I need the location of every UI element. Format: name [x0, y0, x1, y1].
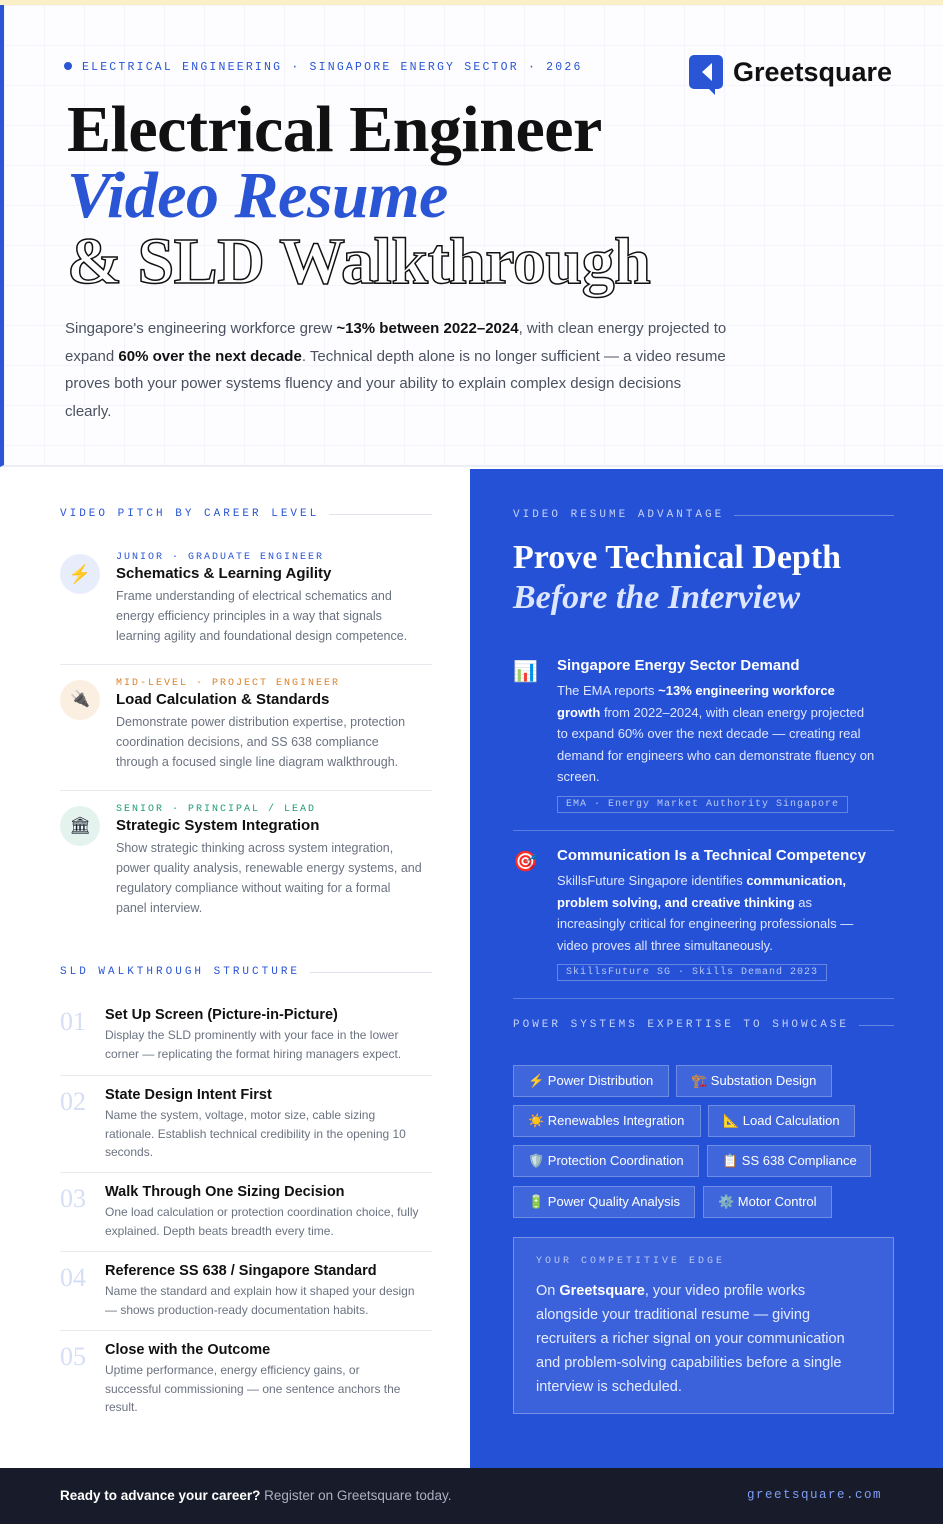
block: communication [513, 847, 894, 999]
card: senior: Show strategic thinking across system integration, power quality analysis, renewable energy systems, and regulatory compliance without waiting for a formal panel interview. [116, 841, 422, 915]
step 05: Uptime performance, energy efficiency gains, or successful commissioning — one sentence anchors the result. [105, 1363, 400, 1414]
label: expertise: POWER SYSTEMS EXPERTISE TO SHOWCASE [513, 1019, 849, 1031]
section label: SLD WALKTHROUGH STRUCTURE [60, 966, 300, 978]
chips [513, 1065, 871, 1218]
card: mid: 🔌 [70, 691, 90, 708]
card: mid: Demonstrate power distribution expertise, protection coordination decisions, and SS 638 compliance through a focused single line diagram walkthrough. [116, 715, 405, 769]
label: VIDEO RESUME ADVANTAGE [513, 509, 724, 521]
step 02: 02 [60, 1087, 86, 1116]
footer [0, 1468, 943, 1524]
chips: 📋 SS 638 Compliance [722, 1153, 857, 1168]
card: mid [60, 678, 432, 791]
step 01 [60, 1007, 432, 1076]
card: senior: SENIOR · PRINCIPAL / LEAD [116, 804, 316, 815]
block: demand: 📊 [513, 661, 538, 683]
block: demand: Singapore Energy Sector Demand [557, 657, 800, 674]
card: junior [60, 552, 432, 665]
step 05 [60, 1342, 400, 1414]
block: demand [513, 657, 894, 831]
chips: 🏗️ Substation Design [691, 1073, 816, 1088]
block: communication: SkillsFuture SG · Skills Demand 2023 [566, 967, 818, 978]
chips: 🔋 Power Quality Analysis [528, 1194, 680, 1209]
chips: ⚡ Power Distribution [528, 1073, 653, 1088]
step 05: Close with the Outcome [105, 1342, 270, 1358]
step 03: One load calculation or protection coordination choice, fully explained. Depth beats breadth every time. [105, 1205, 419, 1238]
step 05: 05 [60, 1342, 86, 1371]
heading [512, 539, 841, 616]
competitive edge box: On Greetsquare, your video profile works alongside your traditional resume — giving recruiters a richer signal on your communication and problem-solving capabilities before a single interview is scheduled. [536, 1283, 845, 1395]
card: junior: Schematics & Learning Agility [116, 565, 331, 582]
left panel: career levels [60, 508, 432, 915]
title: & SLD Walkthrough [67, 225, 650, 298]
competitive edge box: YOUR COMPETITIVE EDGE [536, 1256, 725, 1267]
chips: ⚙️ Motor Control [718, 1194, 817, 1209]
card: mid: Load Calculation & Standards [116, 691, 329, 708]
footer: greetsquare.com [747, 1488, 882, 1502]
card: mid: MID-LEVEL · PROJECT ENGINEER [116, 678, 340, 689]
competitive edge box [513, 1237, 894, 1414]
block: demand: The EMA reports ~13% engineering workforce growth from 2022–2024, with clean energy projected to expand 60% over the next decade — creating real demand for engineers who can demonstrate fluency on screen. [557, 683, 874, 784]
step 02 [60, 1087, 432, 1173]
block: communication: Communication Is a Technical Competency [557, 847, 866, 864]
intro: Singapore's engineering workforce grew ~13% between 2022–2024, with clean energy projected to expand 60% over the next decade. Technical depth alone is no longer sufficient — a video resume proves both your power systems fluency and your ability to explain complex design decisions [65, 320, 726, 392]
block: demand: EMA · Energy Market Authority Singapore [566, 798, 839, 810]
heading: Prove Technical Depth [513, 539, 841, 576]
chips: ☀️ Renewables Integration [528, 1113, 684, 1128]
step 01: Display the SLD prominently with your face in the lower corner — replicating the format hiring managers expect. [105, 1028, 401, 1060]
right panel [470, 469, 943, 1468]
card: junior: ⚡ [69, 564, 91, 584]
title [67, 93, 651, 298]
card: senior [60, 804, 422, 915]
block: communication: SkillsFuture Singapore identifies communication, problem solving, and creative thinking as increasingly critical for engineering professionals — video proves all three simultaneously. [557, 873, 853, 952]
step 03: 03 [60, 1184, 86, 1213]
step 03: Walk Through One Sizing Decision [105, 1184, 345, 1200]
step 04 [60, 1263, 432, 1331]
card: junior: JUNIOR · GRADUATE ENGINEER [116, 552, 324, 563]
step 01: 01 [60, 1007, 86, 1036]
step 01: Set Up Screen (Picture-in-Picture) [105, 1007, 338, 1023]
section label: VIDEO PITCH BY CAREER LEVEL [60, 508, 319, 520]
card: senior: 🏛 [69, 816, 91, 835]
title: Electrical Engineer [67, 93, 602, 166]
title: Video Resume [67, 159, 448, 232]
card: junior: Frame understanding of electrical schematics and energy efficiency principles in a way that signals learning agility and foundational design competence. [116, 589, 407, 643]
header panel [0, 5, 943, 467]
chips: 📐 Load Calculation [723, 1113, 840, 1128]
chips: 🛡️ Protection Coordination [528, 1153, 684, 1168]
step 04: Name the standard and explain how it shaped your design — shows production-ready documentation habits. [105, 1284, 415, 1316]
heading: Before the Interview [513, 579, 800, 616]
step 02: Name the system, voltage, motor size, cable sizing rationale. Establish technical credibility in the opening 10 seconds. [105, 1108, 406, 1159]
step 04: Reference SS 638 / Singapore Standard [105, 1263, 377, 1279]
block: communication: 🎯 [513, 851, 538, 873]
step 04: 04 [60, 1263, 86, 1292]
eyebrow: ELECTRICAL ENGINEERING · SINGAPORE ENERGY SECTOR · 2026 [82, 61, 583, 74]
top accent strip [0, 0, 943, 5]
card: senior: Strategic System Integration [116, 817, 319, 834]
logo [689, 55, 892, 95]
footer: Ready to advance your career? Register on Greetsquare today. [60, 1488, 451, 1503]
logo: Greetsquare [733, 57, 892, 87]
intro: clearly. [65, 402, 111, 420]
step 03 [60, 1184, 432, 1252]
step 02: State Design Intent First [105, 1087, 272, 1103]
